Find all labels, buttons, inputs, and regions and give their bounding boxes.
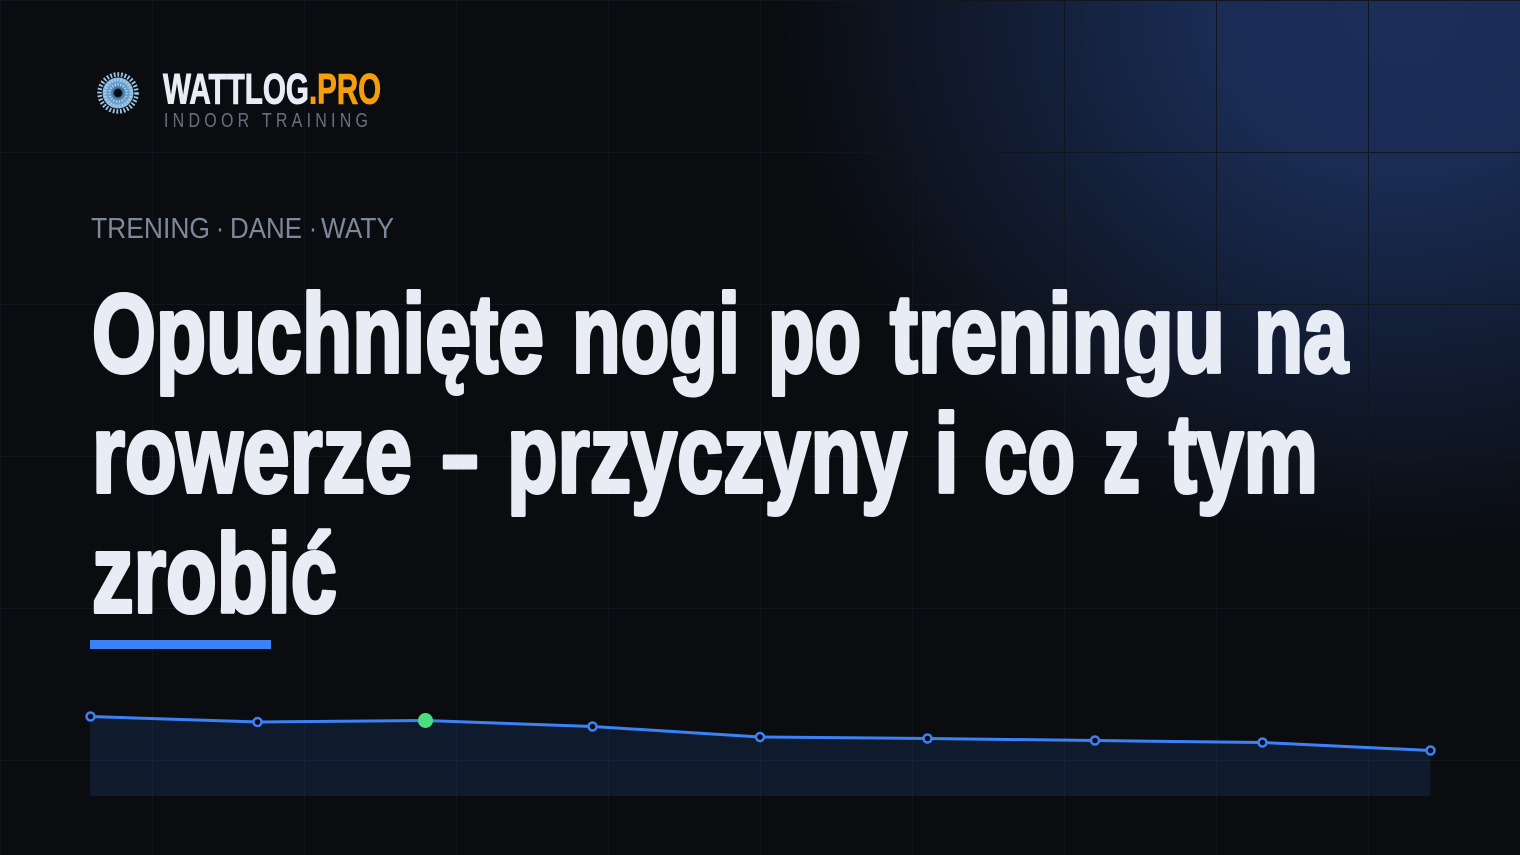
brand tagline: INDOOR TRAINING xyxy=(164,109,368,131)
title: tym xyxy=(1169,392,1318,516)
title: i xyxy=(934,392,959,516)
chart data points xyxy=(86,712,1434,754)
line chart: power trend xyxy=(86,712,1434,796)
title: Opuchnięte xyxy=(92,272,544,396)
brand name: .PRO xyxy=(309,66,381,114)
title: rowerze xyxy=(92,392,412,516)
title: na xyxy=(1254,272,1349,396)
title: nogi xyxy=(572,272,740,396)
icon: cassette cog xyxy=(100,74,136,112)
eyebrow: categories xyxy=(91,213,394,245)
title: co xyxy=(984,392,1075,516)
title: przyczyny xyxy=(507,392,907,516)
title: treningu xyxy=(890,272,1225,396)
title: – xyxy=(442,392,478,516)
chart line xyxy=(90,716,1430,750)
eyebrow: categories: · xyxy=(216,213,224,245)
logo: wattlog.pro brand xyxy=(100,66,381,131)
chart area fill xyxy=(90,716,1430,796)
eyebrow: categories: · xyxy=(309,213,317,245)
title: zrobić xyxy=(92,512,337,636)
brand name: WATTLOG xyxy=(163,66,309,114)
eyebrow: categories: WATY xyxy=(321,213,394,245)
title xyxy=(92,272,1349,636)
eyebrow: categories: DANE xyxy=(230,213,302,245)
title accent underline xyxy=(90,640,271,649)
title: po xyxy=(768,272,861,396)
highlighted data point xyxy=(418,713,433,728)
title: z xyxy=(1103,392,1140,516)
eyebrow: categories: TRENING xyxy=(91,213,210,245)
